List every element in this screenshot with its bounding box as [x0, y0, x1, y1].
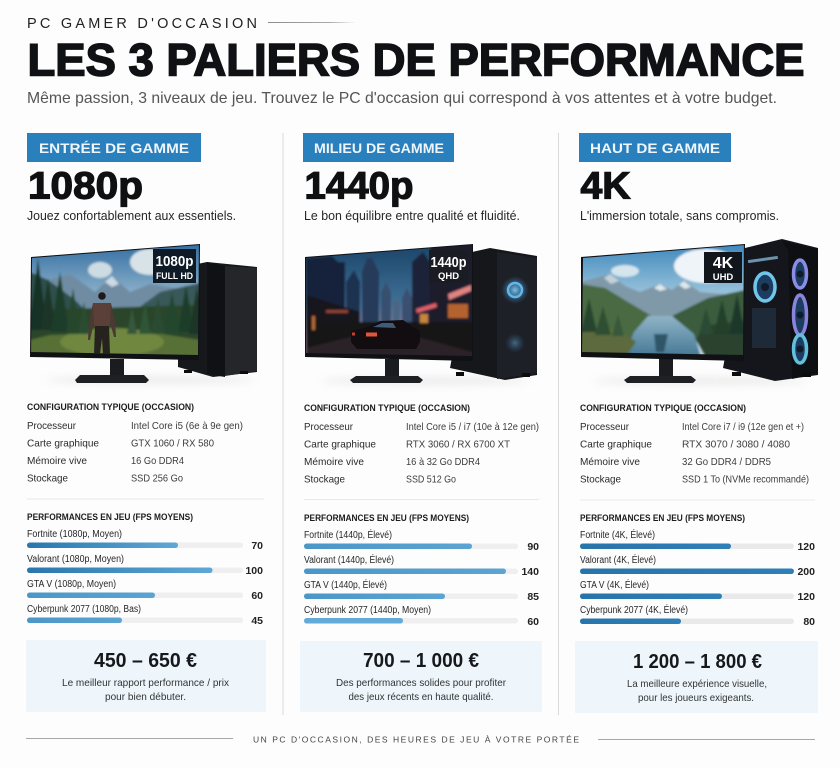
column dividers: [282, 133, 559, 715]
configuration table: RTX 3070 / 3080 / 4080: [682, 438, 790, 450]
monitor frame: [581, 244, 745, 361]
configuration table: CONFIGURATION TYPIQUE (OCCASION): [580, 402, 746, 413]
monitor frame: [30, 244, 200, 360]
fps bars: PERFORMANCES EN JEU (FPS MOYENS): [580, 512, 745, 523]
configuration table: Intel Core i5 / i7 (10e à 12e gen): [406, 421, 539, 433]
game scene: neon city with car: [305, 244, 474, 362]
configuration table: Carte graphique: [580, 438, 652, 450]
configuration table: CONFIGURATION TYPIQUE (OCCASION): [304, 402, 470, 413]
configuration table: Mémoire vive: [27, 455, 87, 467]
illustration: monitor and tower: [29, 244, 257, 384]
car: [351, 320, 420, 349]
fps bars: 120: [797, 591, 815, 603]
resolution badge: 4K: [713, 255, 734, 272]
resolution badge: FULL HD: [156, 271, 193, 282]
illustration: monitor and tower: [581, 239, 818, 385]
resolution badge: [704, 252, 742, 283]
configuration table: Stockage: [304, 474, 345, 486]
subtitle: Même passion, 3 niveaux de jeu. Trouvez le PC d'occasion qui correspond à vos attentes et à votre budget.: [27, 90, 777, 107]
price card: La meilleure expérience visuelle,: [627, 679, 767, 690]
tier badge: HAUT DE GAMME: [590, 140, 720, 156]
fps bars: 60: [251, 590, 263, 602]
resolution badge: [153, 249, 196, 283]
fans: [755, 260, 806, 363]
configuration table: Processeur: [580, 421, 629, 433]
price card: des jeux récents en haute qualité.: [348, 692, 494, 703]
price card: 700 – 1 000 €: [363, 650, 479, 672]
warrior: [88, 292, 116, 354]
fps bars: Cyberpunk 2077 (1440p, Moyen): [304, 605, 431, 616]
title: LES 3 PALIERS DE PERFORMANCE: [28, 34, 804, 86]
fps bars: PERFORMANCES EN JEU (FPS MOYENS): [304, 512, 469, 523]
fps bars: 70: [251, 540, 263, 552]
tower: [723, 239, 818, 381]
configuration table: [27, 401, 243, 484]
price card: 450 – 650 €: [94, 650, 197, 672]
fps bars: [304, 512, 539, 628]
price card: pour les joueurs exigeants.: [638, 693, 754, 704]
resolution badge: [429, 250, 468, 283]
panel: haut de gamme: [575, 133, 818, 713]
resolution: 4K: [580, 166, 631, 208]
fps bars: Valorant (1080p, Moyen): [27, 554, 124, 565]
resolution badge: QHD: [438, 271, 459, 282]
tower: [178, 262, 257, 377]
panel: entrée de gamme: [26, 133, 266, 712]
game scene: warrior in forest valley: [29, 244, 205, 360]
configuration table: [304, 402, 539, 486]
illustration: monitor and tower: [305, 244, 537, 385]
configuration table: Mémoire vive: [304, 456, 364, 468]
price card: 1 200 – 1 800 €: [633, 651, 762, 673]
fps bars: 85: [527, 591, 539, 603]
footer: UN PC D'OCCASION, DES HEURES DE JEU À VOTRE PORTÉE: [253, 734, 579, 744]
configuration table: Intel Core i5 (6e à 9e gen): [131, 420, 243, 432]
monitor frame: [305, 244, 473, 361]
tier badge: ENTRÉE DE GAMME: [39, 140, 189, 156]
configuration table: Stockage: [27, 472, 68, 484]
header: [27, 16, 804, 107]
configuration table: RTX 3060 / RX 6700 XT: [406, 438, 511, 450]
tagline: Le bon équilibre entre qualité et fluidité.: [304, 209, 520, 223]
game scene: mountain lake: [581, 244, 745, 362]
configuration table: 32 Go DDR4 / DDR5: [682, 456, 771, 468]
tier badge: [27, 133, 201, 162]
configuration table: CONFIGURATION TYPIQUE (OCCASION): [27, 401, 194, 412]
resolution: 1080p: [28, 166, 143, 208]
tower: [450, 248, 537, 380]
configuration table: 16 à 32 Go DDR4: [406, 456, 480, 468]
fps bars: 45: [251, 615, 263, 627]
price card: [300, 641, 542, 712]
tier badge: [303, 133, 454, 162]
tagline: L'immersion totale, sans compromis.: [580, 209, 779, 223]
eyebrow: PC GAMER D'OCCASION: [27, 16, 257, 32]
stand: [75, 359, 149, 383]
resolution badge: UHD: [713, 272, 733, 283]
price card: Des performances solides pour profiter: [336, 678, 507, 689]
fps bars: GTA V (4K, Élevé): [580, 580, 649, 591]
tagline: Jouez confortablement aux essentiels.: [27, 209, 236, 223]
configuration table: Processeur: [27, 420, 76, 432]
stand: [624, 359, 696, 383]
panel: milieu de gamme: [300, 133, 542, 712]
fps bars: 120: [797, 541, 815, 553]
fps bars: PERFORMANCES EN JEU (FPS MOYENS): [27, 511, 193, 522]
fps bars: GTA V (1440p, Élevé): [304, 580, 387, 591]
price card: [575, 641, 818, 713]
configuration table: SSD 256 Go: [131, 472, 183, 484]
fps bars: GTA V (1080p, Moyen): [27, 579, 116, 590]
fps bars: Fortnite (4K, Élevé): [580, 530, 655, 541]
fps bars: 90: [527, 541, 539, 553]
resolution: 1440p: [304, 166, 414, 208]
fps bars: 140: [521, 566, 539, 578]
stand: [350, 359, 423, 383]
configuration table: Carte graphique: [27, 438, 99, 450]
fps bars: Cyberpunk 2077 (1080p, Bas): [27, 604, 141, 615]
fps bars: 100: [245, 565, 263, 577]
fps bars: Cyberpunk 2077 (4K, Élevé): [580, 605, 688, 616]
fps bars: Fortnite (1440p, Élevé): [304, 530, 392, 541]
configuration table: 16 Go DDR4: [131, 455, 184, 467]
configuration table: Carte graphique: [304, 438, 376, 450]
fps bars: 60: [527, 616, 539, 628]
configuration table: Processeur: [304, 421, 353, 433]
configuration table: SSD 512 Go: [406, 474, 456, 486]
fps bars: 80: [803, 616, 815, 628]
configuration table: SSD 1 To (NVMe recommandé): [682, 474, 809, 486]
configuration table: Stockage: [580, 474, 621, 486]
fps bars: Fortnite (1080p, Moyen): [27, 529, 122, 540]
price card: pour bien débuter.: [105, 692, 186, 703]
tier badge: [579, 133, 731, 162]
configuration table: [580, 402, 809, 486]
fps bars: [27, 511, 263, 627]
configuration table: Mémoire vive: [580, 456, 640, 468]
configuration table: Intel Core i7 / i9 (12e gen et +): [682, 421, 804, 433]
price card: Le meilleur rapport performance / prix: [62, 678, 230, 689]
resolution badge: 1440p: [430, 254, 466, 271]
resolution badge: 1080p: [156, 253, 194, 270]
price card: [26, 640, 266, 712]
configuration table: GTX 1060 / RX 580: [131, 438, 214, 450]
fps bars: Valorant (1440p, Élevé): [304, 555, 394, 566]
fps bars: 200: [797, 566, 815, 578]
fps bars: [580, 512, 815, 628]
tier badge: MILIEU DE GAMME: [314, 140, 444, 156]
fps bars: Valorant (4K, Élevé): [580, 555, 656, 566]
